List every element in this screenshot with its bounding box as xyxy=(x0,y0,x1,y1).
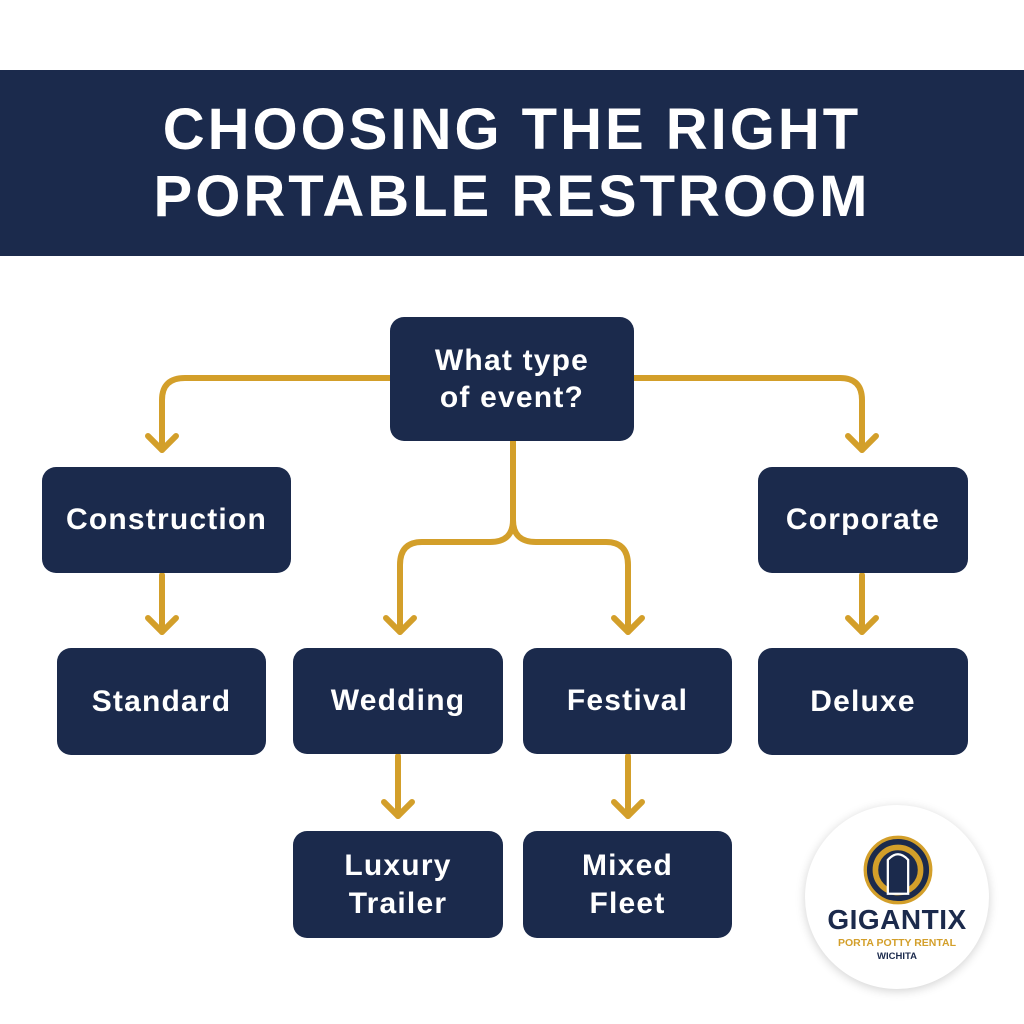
box: Luxury Trailer xyxy=(293,831,503,938)
root question box: of event? xyxy=(440,381,584,414)
title banner: PORTABLE RESTROOM xyxy=(154,164,870,229)
box: Luxury Trailer: Trailer xyxy=(349,886,447,920)
logo badge xyxy=(805,805,989,989)
box: Standard: Standard xyxy=(92,685,231,718)
box: Wedding xyxy=(293,648,503,754)
box: Deluxe xyxy=(758,648,968,755)
root question box: What type xyxy=(435,344,589,376)
box: Corporate: Corporate xyxy=(786,503,940,536)
box: Construction xyxy=(42,467,291,573)
box: Corporate xyxy=(758,467,968,573)
box: Construction: Construction xyxy=(66,503,267,536)
logo badge: WICHITA xyxy=(877,951,917,962)
box: Mixed Fleet: Fleet xyxy=(589,886,666,920)
root question box xyxy=(390,317,634,441)
title banner xyxy=(0,70,1024,256)
box: Deluxe: Deluxe xyxy=(810,685,916,718)
box: Mixed Fleet xyxy=(523,831,732,938)
box: Festival: Festival xyxy=(567,684,688,717)
title banner: CHOOSING THE RIGHT xyxy=(163,97,861,162)
icon: logo emblem xyxy=(864,836,932,904)
box: Mixed Fleet: Mixed xyxy=(582,849,673,882)
box: Wedding: Wedding xyxy=(331,684,465,717)
box: Standard xyxy=(57,648,266,755)
logo badge: PORTA POTTY RENTAL xyxy=(838,937,956,949)
logo text: GIGANTIX xyxy=(827,904,967,935)
box: Festival xyxy=(523,648,732,754)
box: Luxury Trailer: Luxury xyxy=(344,849,452,882)
